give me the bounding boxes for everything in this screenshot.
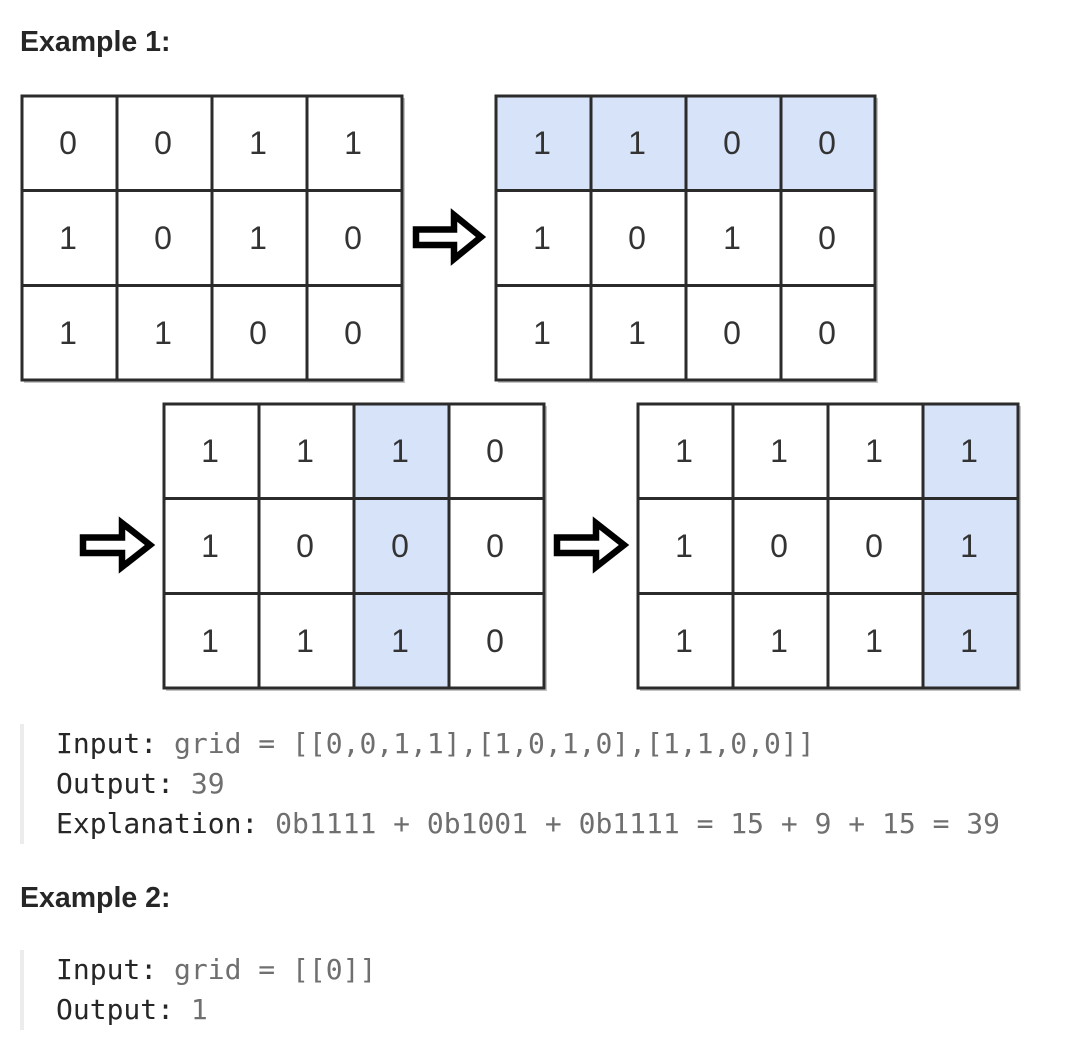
code block: example 1: Input: grid = [[0,0,1,1],[1,0,1,0],[1,1,0,0]]: [56, 727, 815, 760]
heading: Example 2: Example 2:: [20, 882, 170, 914]
arrow 3: [557, 523, 624, 567]
code block: example 1: Output: 39: [56, 767, 225, 800]
grid 2: first row flipped: 0: [723, 125, 741, 161]
grid 4: fourth column flipped: 1: [770, 623, 788, 659]
grid 4: fourth column flipped: 1: [675, 433, 693, 469]
grid 1: initial state: 0: [154, 220, 172, 256]
grid 1: initial state: 1: [249, 125, 267, 161]
code block: example 1: [20, 724, 1000, 844]
grid 3: third column flipped: 0: [296, 528, 314, 564]
grid 1: initial state: 0: [59, 125, 77, 161]
grid 3: third column flipped: 0: [486, 623, 504, 659]
arrow 1: [416, 215, 481, 259]
grid 3: third column flipped: 1: [201, 528, 219, 564]
grid 4: fourth column flipped: 0: [770, 528, 788, 564]
grid 3: third column flipped: 1: [296, 433, 314, 469]
grid 1: initial state: 1: [154, 315, 172, 351]
grid 2: first row flipped: 0: [818, 125, 836, 161]
code block: example 2: Input: grid = [[0]]: [56, 953, 376, 986]
grid 2: first row flipped: 0: [723, 315, 741, 351]
grid 4: fourth column flipped: 1: [675, 528, 693, 564]
grid 3: third column flipped: 0: [486, 528, 504, 564]
grid 3: third column flipped: [164, 404, 546, 690]
grid 4: fourth column flipped: 1: [675, 623, 693, 659]
grid 1: initial state: [22, 96, 404, 382]
grid 2: first row flipped: 0: [818, 315, 836, 351]
grid 2: first row flipped: 1: [533, 125, 551, 161]
grid 3: third column flipped: 0: [391, 528, 409, 564]
grid 4: fourth column flipped: 1: [865, 623, 883, 659]
grid 3: third column flipped: 1: [201, 623, 219, 659]
code block: example 1: Explanation: 0b1111 + 0b1001 + 0b1111 = 15 + 9 + 15 = 39: [56, 807, 1000, 840]
grid 3: third column flipped: 1: [391, 623, 409, 659]
grid 2: first row flipped: 1: [723, 220, 741, 256]
grid 2: first row flipped: 1: [533, 315, 551, 351]
grid 4: fourth column flipped: 1: [960, 623, 978, 659]
grid 2: first row flipped: 1: [533, 220, 551, 256]
grid 3: third column flipped: 1: [201, 433, 219, 469]
grid 1: initial state: 1: [344, 125, 362, 161]
grid 2: first row flipped: 1: [628, 315, 646, 351]
grid 4: fourth column flipped: [638, 404, 1020, 690]
heading: Example 1: Example 1:: [20, 26, 170, 58]
code block: example 2: [20, 950, 376, 1030]
grid 3: third column flipped: 0: [486, 433, 504, 469]
grid 4: fourth column flipped: 1: [960, 528, 978, 564]
grid 1: initial state: 1: [59, 315, 77, 351]
grid 1: initial state: 0: [154, 125, 172, 161]
grid 1: initial state: 0: [344, 315, 362, 351]
grid 1: initial state: 0: [249, 315, 267, 351]
grid 3: third column flipped: 1: [391, 433, 409, 469]
grid 2: first row flipped: 0: [628, 220, 646, 256]
code block: example 2: Output: 1: [56, 993, 208, 1026]
grid 4: fourth column flipped: 1: [960, 433, 978, 469]
grid 4: fourth column flipped: 0: [865, 528, 883, 564]
grid 2: first row flipped: [496, 96, 877, 382]
grid 4: fourth column flipped: 1: [770, 433, 788, 469]
grid 1: initial state: 0: [344, 220, 362, 256]
grid 2: first row flipped: 0: [818, 220, 836, 256]
grid 3: third column flipped: 1: [296, 623, 314, 659]
arrow 2: [83, 523, 150, 567]
grid 1: initial state: 1: [249, 220, 267, 256]
grid 4: fourth column flipped: 1: [865, 433, 883, 469]
grid 1: initial state: 1: [59, 220, 77, 256]
grid 2: first row flipped: 1: [628, 125, 646, 161]
